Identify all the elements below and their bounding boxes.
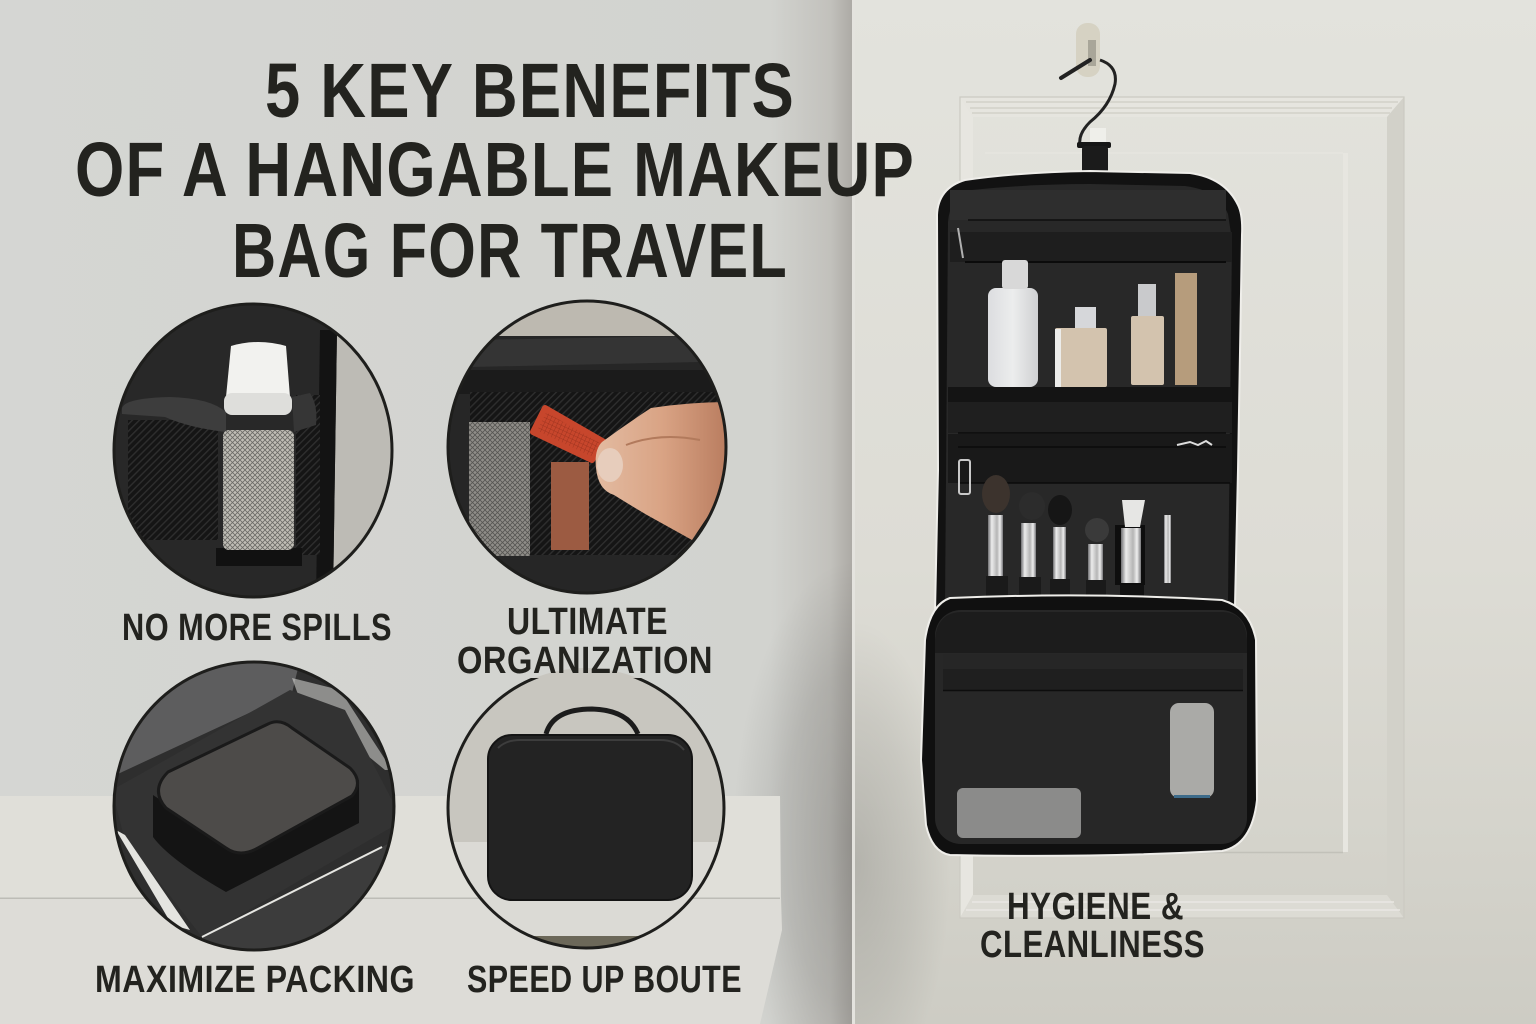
label: ultimate organization [457,601,713,682]
bottle and cosmetics [988,260,1197,387]
wall background [0,0,856,1024]
title: OF A HANGABLE MAKEUP [75,127,915,213]
label: hygiene and cleanliness [980,886,1205,966]
label: no more spills: NO MORE SPILLS [122,607,392,649]
icon: wall hook [1061,23,1115,182]
title [75,48,915,294]
circle: no more spills [110,300,400,600]
door panel moulding [960,97,1404,918]
brushes [982,475,1171,600]
title: 5 KEY BENEFITS [265,48,795,134]
circle: maximize packing [110,658,400,955]
label: speed up boute: SPEED UP BOUTE [467,959,742,1001]
white shelf [0,796,782,1024]
sponge: tall [1170,703,1214,798]
label: ultimate organization: ORGANIZATION [457,640,713,682]
sponge: flat [957,788,1081,838]
label: maximize packing: MAXIMIZE PACKING [95,959,415,1001]
label: hygiene and cleanliness: HYGIENE & [1007,886,1184,928]
top zip pocket [950,190,1232,262]
bag body [935,171,1242,612]
middle pocket [948,387,1232,494]
door [852,0,1536,1024]
lower zip pouch [921,595,1257,856]
circle: speed up route [445,660,730,952]
hanging makeup bag [921,171,1257,856]
label: hygiene and cleanliness: CLEANLINESS [980,924,1205,966]
circle: ultimate organization [445,300,730,595]
title: BAG FOR TRAVEL [232,208,788,294]
label: ultimate organization: ULTIMATE [507,601,668,643]
